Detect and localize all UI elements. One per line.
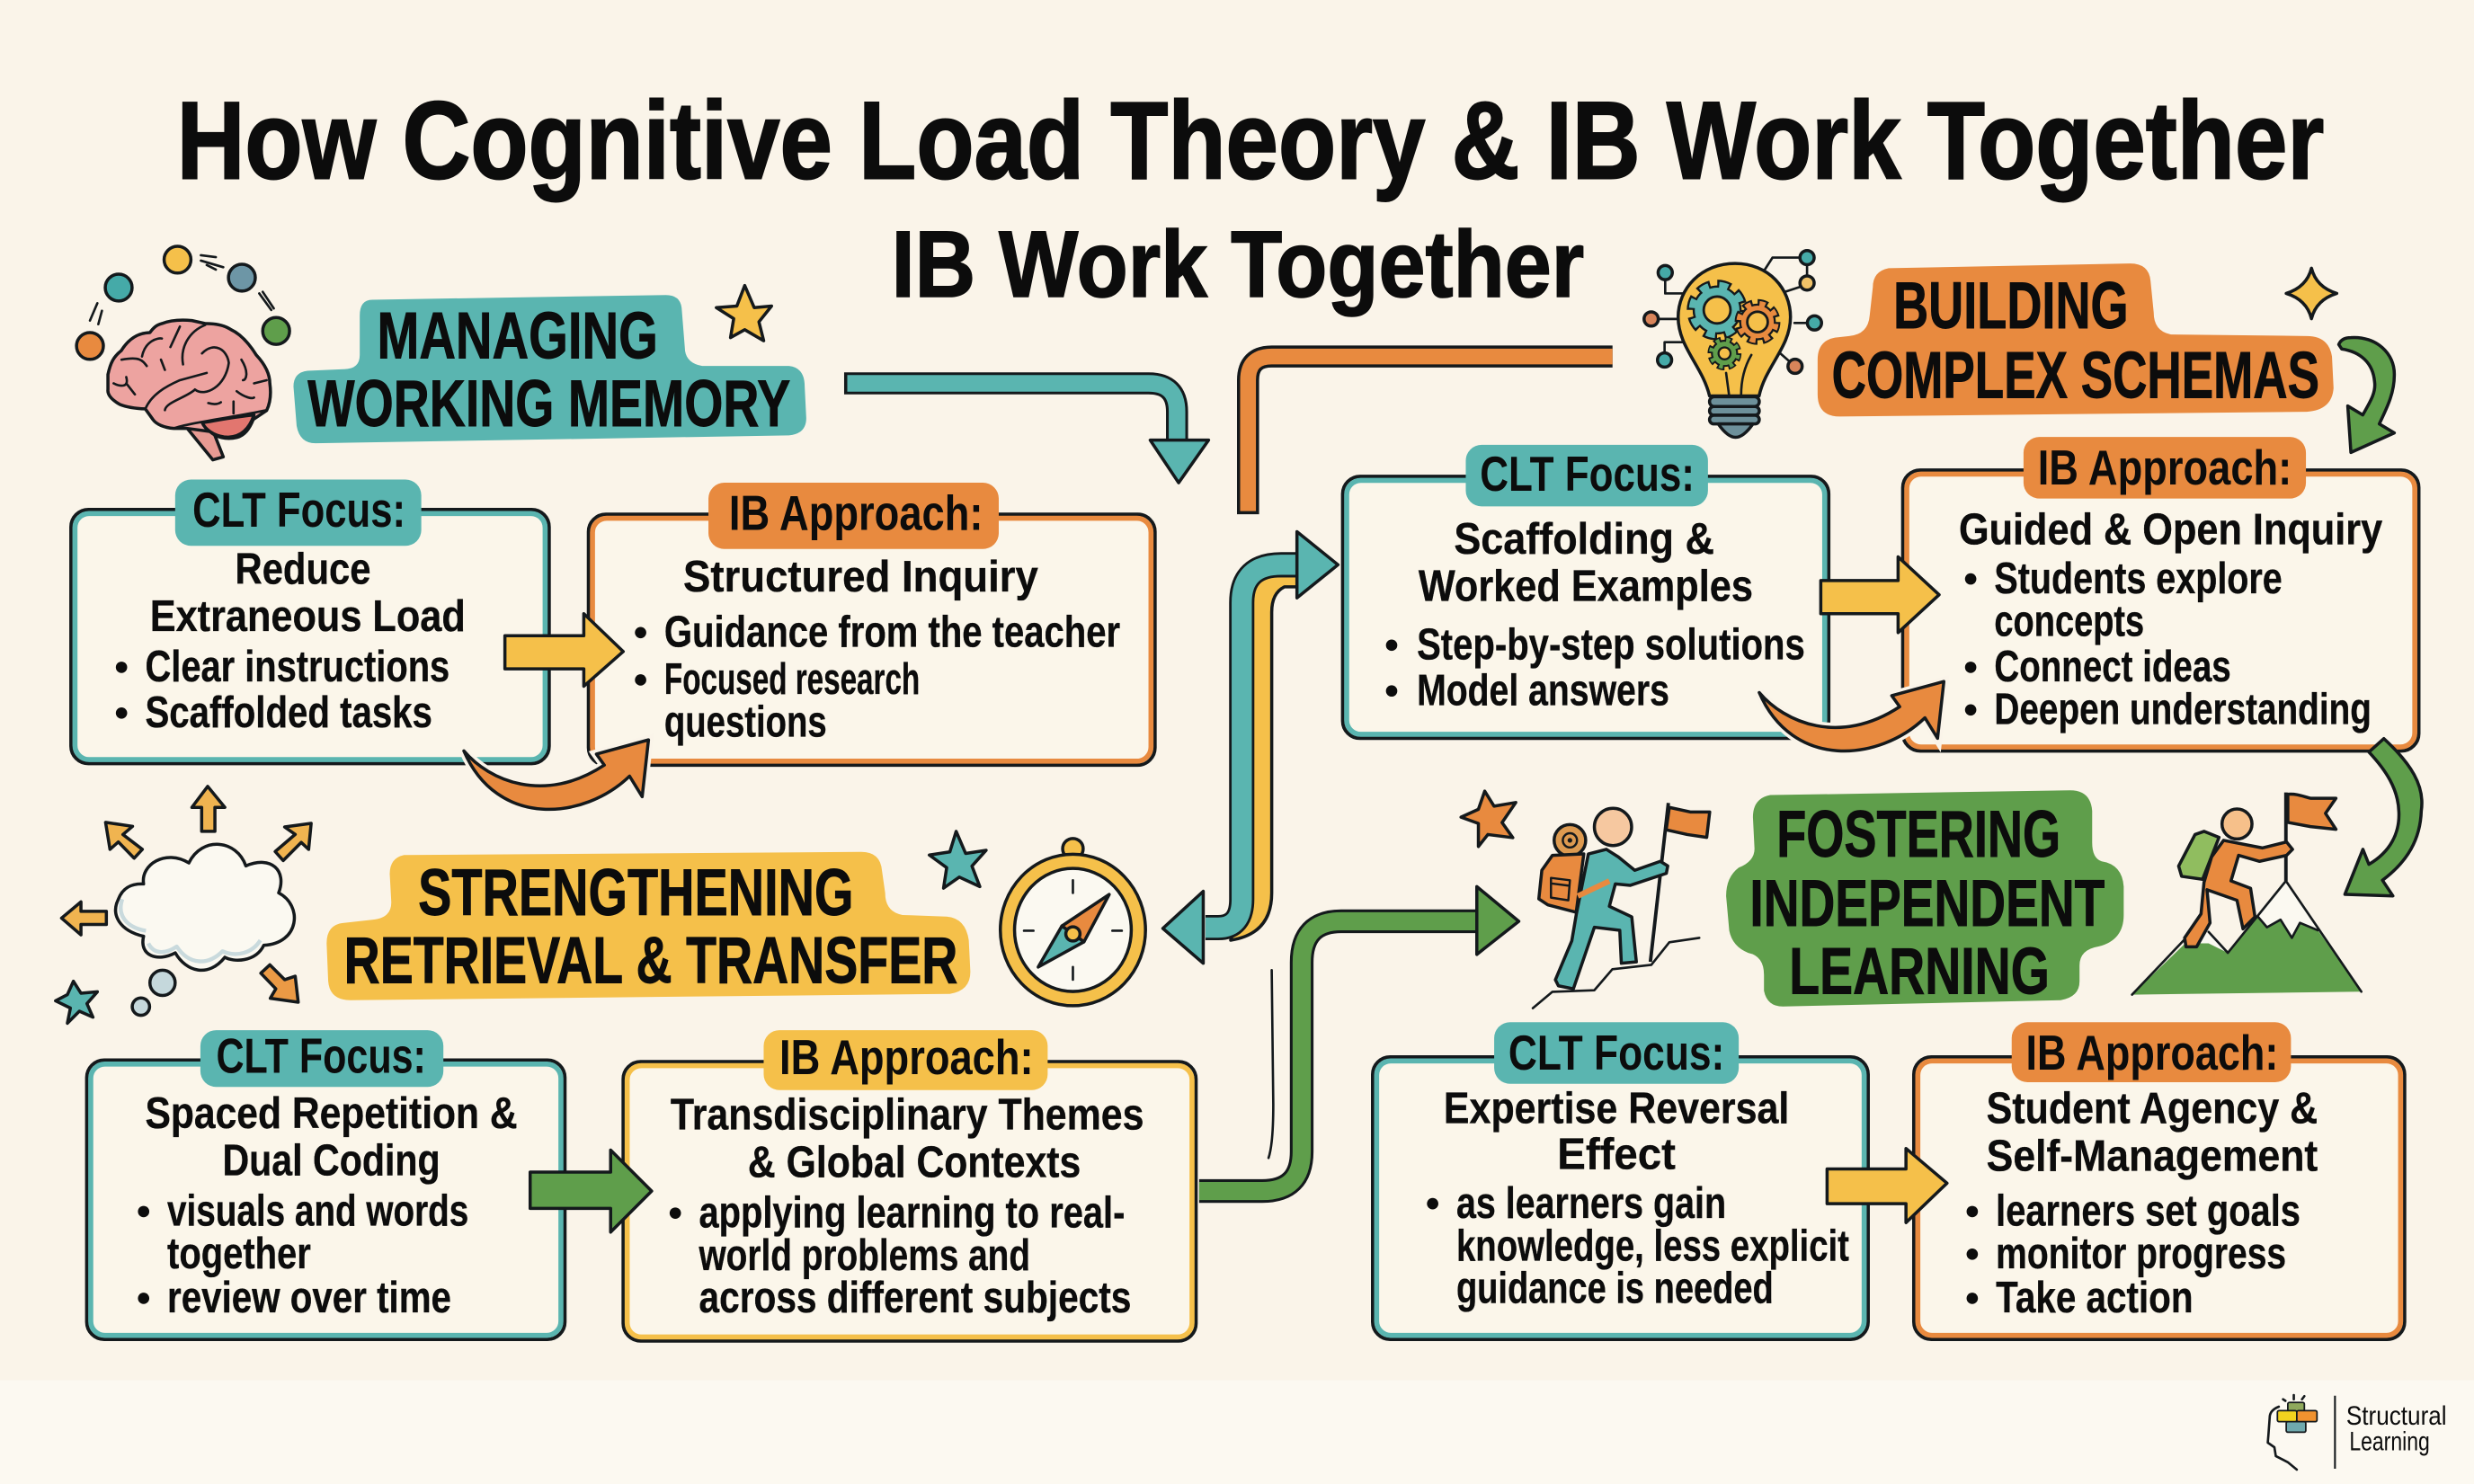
panel text: Spaced Repetition & xyxy=(145,1089,518,1138)
panel text: learners set goals xyxy=(1996,1187,2300,1236)
arrow: up right xyxy=(275,823,311,860)
title xyxy=(177,79,2324,317)
arrow: orange curved schemas xyxy=(1759,681,1944,751)
logo: structural learning xyxy=(2268,1395,2447,1470)
arrow: green curve to fostering xyxy=(2345,739,2422,896)
panel text: Reduce xyxy=(236,545,370,593)
panel text: Guided & Open Inquiry xyxy=(1959,506,2383,555)
panel: IB approach retrieval xyxy=(623,1030,1196,1341)
icon: star teal xyxy=(930,831,986,888)
icon: star yellow xyxy=(716,286,771,341)
heading: fostering independent learning: INDEPENDENT xyxy=(1749,866,2105,940)
icon: compass xyxy=(1001,839,1145,1006)
label: CLT Focus: xyxy=(1480,447,1695,502)
panel text: Dual Coding xyxy=(222,1137,441,1186)
gear: teal xyxy=(1693,286,1741,334)
panel text: Expertise Reversal xyxy=(1444,1085,1789,1133)
panel text: Extraneous Load xyxy=(150,592,466,641)
heading: managing working memory: MANAGING xyxy=(377,298,658,372)
panel text: questions xyxy=(664,698,827,747)
panel text xyxy=(1959,506,2383,734)
panel text: applying learning to real- xyxy=(699,1188,1125,1237)
label: IB Approach: xyxy=(779,1030,1034,1085)
panel: CLT focus schemas xyxy=(1343,445,1829,738)
panel text: as learners gain xyxy=(1456,1179,1726,1228)
heading: fostering independent learning xyxy=(1726,790,2123,1009)
panel text: Model answers xyxy=(1417,667,1669,715)
panel text xyxy=(1386,515,1805,715)
arrow: teal from heading xyxy=(844,383,1208,483)
panel text: Scaffolded tasks xyxy=(145,689,432,737)
panel text: concepts xyxy=(1994,597,2144,645)
title: IB Work Together xyxy=(892,212,1584,317)
gear: green xyxy=(1711,340,1738,367)
heading: fostering independent learning: LEARNING xyxy=(1789,934,2050,1009)
panel text: & Global Contexts xyxy=(748,1138,1081,1186)
panel text: Worked Examples xyxy=(1419,563,1753,611)
heading: managing working memory xyxy=(293,295,806,443)
icon: building bulb with gears xyxy=(1644,251,1821,438)
logo: structural learning: Learning xyxy=(2349,1426,2430,1456)
arrow: green curve to IB approach xyxy=(2339,337,2394,452)
panel text: Structured Inquiry xyxy=(683,553,1038,601)
icon: sparkle star xyxy=(2286,268,2336,319)
panel: CLT focus independent xyxy=(1373,1022,1868,1339)
panel text: world problems and xyxy=(699,1231,1030,1280)
label: IB Approach: xyxy=(2038,440,2292,495)
panel text: review over time xyxy=(167,1274,451,1322)
arrow: yellow CLT to IB independent xyxy=(1827,1149,1947,1222)
panel: IB approach managing xyxy=(589,483,1155,765)
panel text: monitor progress xyxy=(1996,1230,2286,1278)
panel text: across different subjects xyxy=(699,1274,1131,1322)
panel text: Take action xyxy=(1996,1274,2194,1322)
panel text: Clear instructions xyxy=(145,643,449,691)
label xyxy=(175,480,422,546)
panel text: Self-Management xyxy=(1987,1132,2318,1180)
panel text xyxy=(635,553,1120,747)
panel text: Transdisciplinary Themes xyxy=(671,1091,1144,1140)
label: CLT Focus: xyxy=(216,1028,426,1083)
icon: climber on mountain xyxy=(2132,793,2362,995)
label: IB Approach: xyxy=(2026,1026,2278,1080)
arrow: up xyxy=(191,786,225,831)
arrow: orange connector xyxy=(1248,357,1613,514)
panel text: Deepen understanding xyxy=(1994,686,2372,734)
arrow: left xyxy=(61,902,106,935)
panel text: Students explore xyxy=(1994,555,2283,603)
arrow: yellow CLT to IB managing xyxy=(505,614,623,686)
panel text xyxy=(116,545,466,737)
icon: thought cloud with arrows xyxy=(61,786,311,1016)
label: CLT Focus: xyxy=(1508,1026,1724,1080)
panel text: Guidance from the teacher xyxy=(664,609,1120,657)
arrow: green connector to hiker xyxy=(1199,886,1518,1191)
panel: IB approach schemas xyxy=(1903,437,2419,751)
panel text: together xyxy=(167,1230,311,1278)
arrow: green CLT to IB retrieval xyxy=(530,1150,652,1232)
panel text: guidance is needed xyxy=(1456,1265,1774,1313)
arrow: down right xyxy=(261,964,298,1002)
icon: brain juggling xyxy=(76,246,289,460)
label: CLT Focus: xyxy=(192,483,405,538)
panel text xyxy=(1427,1085,1849,1313)
icon: hiker with flag xyxy=(1533,803,1710,1009)
panel text: Scaffolding & xyxy=(1454,515,1714,564)
panel text xyxy=(670,1091,1144,1322)
arrow: teal and yellow double arrow xyxy=(1163,531,1338,964)
heading: strengthening retrieval and transfer xyxy=(326,852,970,1000)
arrow: up left xyxy=(105,822,142,858)
panel text: knowledge, less explicit xyxy=(1456,1222,1849,1270)
icon: star orange xyxy=(1461,791,1516,847)
panel text: Connect ideas xyxy=(1994,643,2231,691)
logo: structural learning: Structural xyxy=(2346,1401,2447,1431)
gear: orange xyxy=(1740,304,1775,340)
panel text: Effect xyxy=(1557,1131,1676,1179)
panel: IB approach independent xyxy=(1914,1022,2405,1339)
panel text xyxy=(1967,1085,2318,1322)
heading: building complex schemas: BUILDING xyxy=(1893,268,2129,342)
arrow: orange curved managing xyxy=(464,740,648,809)
arrow: yellow CLT to IB schemas xyxy=(1820,557,1939,633)
panel text: Student Agency & xyxy=(1987,1085,2318,1133)
label: IB Approach: xyxy=(729,486,983,541)
panel text xyxy=(138,1089,518,1322)
panel text: Focused research xyxy=(664,655,920,704)
heading: strengthening retrieval and transfer: RETRIEVAL & TRANSFER xyxy=(344,922,957,997)
label xyxy=(708,483,999,549)
heading: building complex schemas xyxy=(1818,263,2334,416)
icon: star teal small xyxy=(56,982,97,1023)
panel: CLT focus retrieval xyxy=(87,1028,565,1339)
panel text: visuals and words xyxy=(167,1187,468,1236)
heading: fostering independent learning: FOSTERING xyxy=(1776,796,2060,871)
heading: strengthening retrieval and transfer: STRENGTHENING xyxy=(418,855,854,929)
heading: managing working memory: WORKING MEMORY xyxy=(307,366,790,440)
panel: CLT focus managing xyxy=(71,480,549,763)
panel text: Step-by-step solutions xyxy=(1417,621,1805,670)
